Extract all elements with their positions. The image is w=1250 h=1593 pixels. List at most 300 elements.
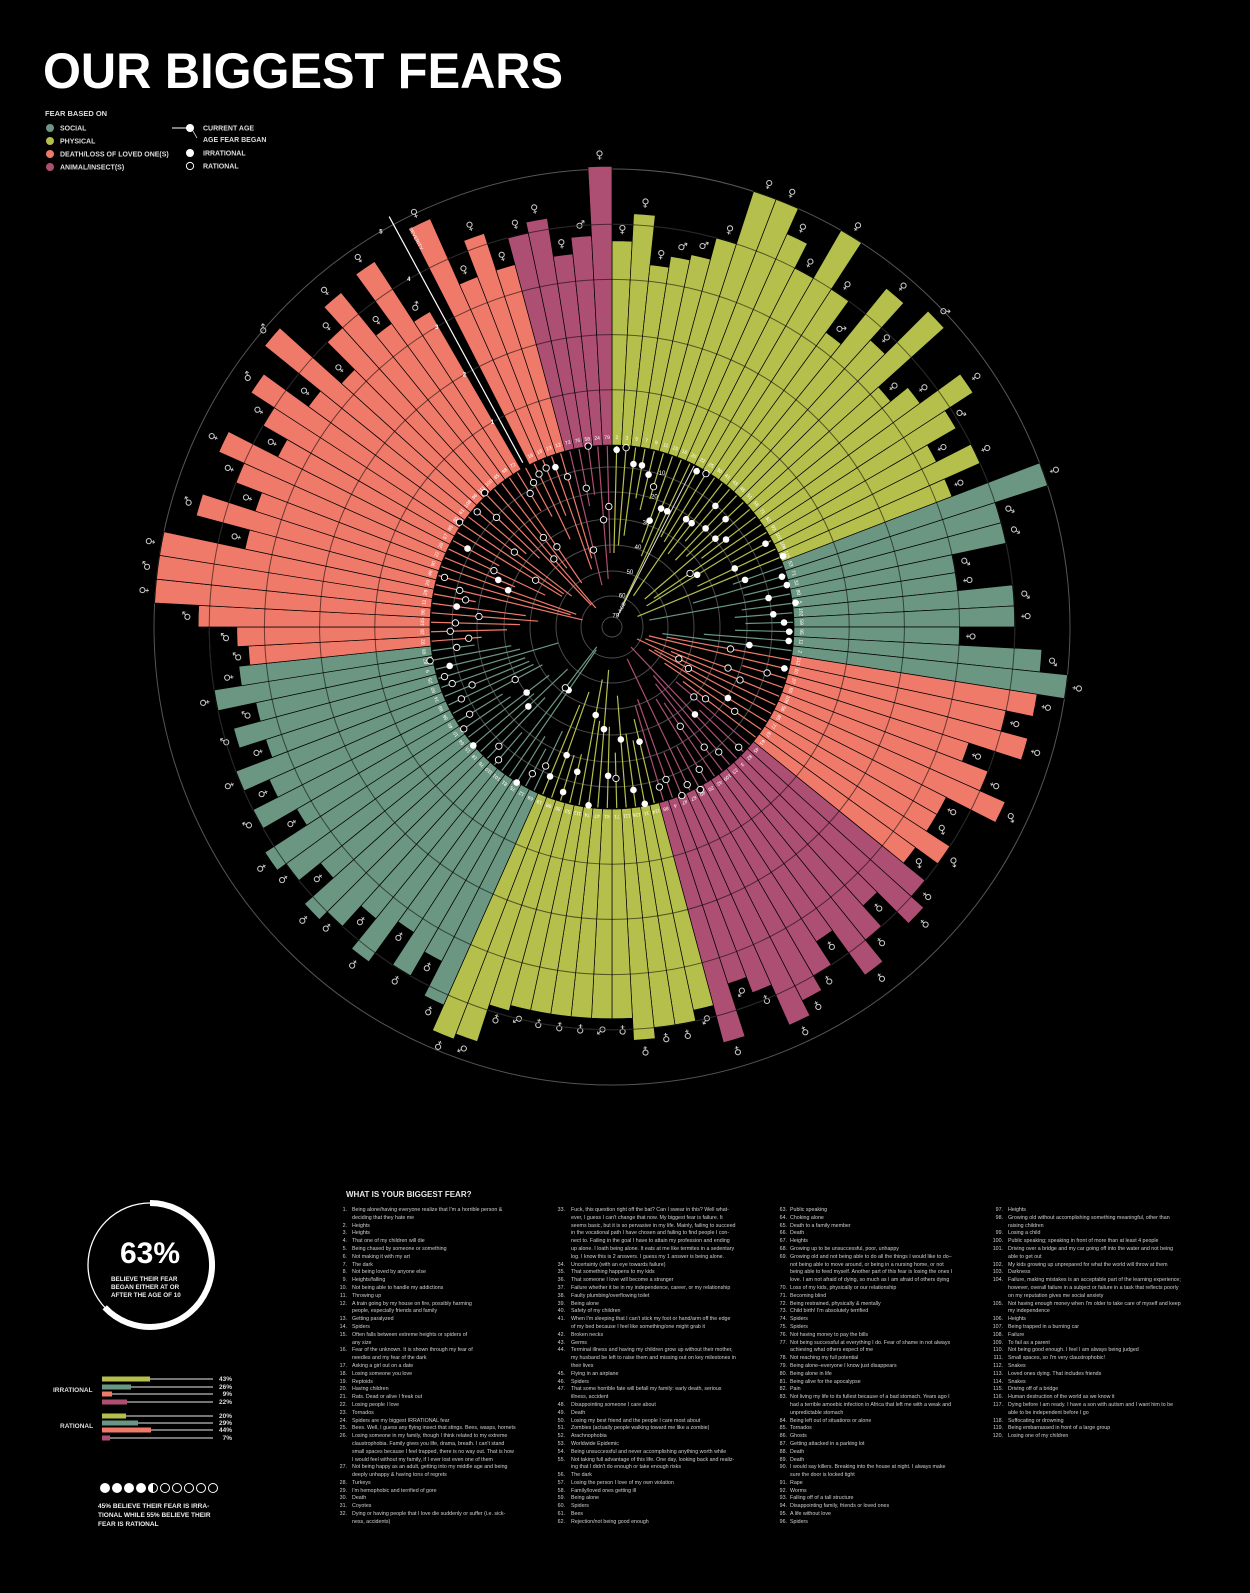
list column 3: Death xyxy=(790,1449,804,1455)
radial chart: ♀ xyxy=(529,202,540,216)
radial chart: ♂ xyxy=(700,1012,712,1027)
text: 43. xyxy=(558,1340,565,1346)
radial chart: 20 xyxy=(651,495,658,501)
text: 33. xyxy=(558,1207,565,1213)
text: 111. xyxy=(993,1355,1003,1361)
radial chart: ♀ xyxy=(987,779,1002,792)
radial chart: ♀ xyxy=(319,920,334,935)
radial chart: 12 xyxy=(555,442,562,449)
list column 3: Rape xyxy=(790,1480,803,1486)
radial chart: ♀ xyxy=(422,1003,435,1019)
radial chart: 3 xyxy=(739,761,745,767)
radial chart: 10 xyxy=(452,730,460,738)
text: 91. xyxy=(780,1480,787,1486)
radial chart: ♂ xyxy=(934,821,950,837)
radial chart: 20 xyxy=(690,453,697,460)
list column 2: ever, I guess I can't change that now. My biggest fear is failure. It xyxy=(571,1215,723,1221)
radial chart: 102 xyxy=(797,608,804,617)
text: 69. xyxy=(780,1254,787,1260)
radial chart: ♀ xyxy=(1039,702,1054,713)
radial chart: 101 xyxy=(492,772,502,782)
radial chart: ♀ xyxy=(919,889,935,903)
list column 3: Becoming blind xyxy=(790,1293,826,1299)
list column 4: able to be independent before I go xyxy=(1008,1410,1089,1416)
radial chart: ♀ xyxy=(251,404,266,417)
radial chart: ♂ xyxy=(958,556,972,568)
radial chart: ♀ xyxy=(284,816,299,830)
radial chart: ♀ xyxy=(724,222,735,237)
stat: irrational vs rational bars: 9% xyxy=(223,1391,232,1398)
list column 4: able to get out xyxy=(1008,1254,1042,1260)
list column 4: Heights xyxy=(1008,1207,1026,1213)
text: 35. xyxy=(558,1269,565,1275)
radial chart: ♀ xyxy=(824,938,838,953)
radial chart: ♀ xyxy=(298,384,313,399)
radial chart: 110 xyxy=(484,766,494,776)
text: 119. xyxy=(993,1425,1003,1431)
list column 1: Not making it with my art xyxy=(352,1254,410,1260)
list column 2: Broken necks xyxy=(571,1332,603,1338)
stat: 63% ring: BELIEVE THEIR FEAR xyxy=(111,1276,178,1283)
list column 2: Spiders xyxy=(571,1503,589,1509)
radial chart: ♀ xyxy=(250,746,265,758)
text: 44. xyxy=(558,1347,565,1353)
radial chart: 29 xyxy=(425,579,432,586)
radial chart: ♀ xyxy=(240,492,255,504)
list column 3: Being left out of situations or alone xyxy=(790,1418,871,1424)
text: 116. xyxy=(993,1394,1003,1400)
list column 1: Turkeys xyxy=(352,1480,371,1486)
radial chart: 50 xyxy=(627,570,634,576)
list column 4: Losing one of my children xyxy=(1008,1433,1068,1439)
list column 1: Asking a girl out on a date xyxy=(352,1363,413,1369)
radial chart: ♀ xyxy=(796,221,809,236)
radial chart: 85 xyxy=(493,473,501,481)
list column 4: Small spaces, so I'm very claustrophobic! xyxy=(1008,1355,1105,1361)
stat: irrational vs rational bars: 22% xyxy=(219,1399,232,1406)
text: 51. xyxy=(558,1425,565,1431)
radial chart: ♀ xyxy=(595,148,604,162)
list column 2: Death xyxy=(571,1410,585,1416)
list column 2: Being unsuccessful and never accomplishing anything worth while xyxy=(571,1449,726,1455)
stat: irrational vs rational bars: 20% xyxy=(219,1413,232,1420)
radial chart: ♀ xyxy=(961,575,975,585)
list column 1: Fear of the unknown. It is shown through my fear of xyxy=(352,1347,473,1353)
list column 4: however, overall failure in a subject or failure in a task that reflects poorly xyxy=(1008,1285,1178,1291)
radial chart: ♀ xyxy=(319,319,334,334)
radial chart: ♀ xyxy=(432,1038,445,1053)
list column 3: Being restrained, physically & mentally xyxy=(790,1301,881,1307)
text: 26. xyxy=(340,1433,347,1439)
text: 64. xyxy=(780,1215,787,1221)
radial chart: 69 xyxy=(527,794,534,801)
list column 3: Not having money to pay the bills xyxy=(790,1332,868,1338)
radial chart: 2 xyxy=(796,650,803,654)
list column 4: Losing a child xyxy=(1008,1230,1040,1236)
list column 2: Spiders xyxy=(571,1379,589,1385)
text: 72. xyxy=(780,1301,787,1307)
text: 65. xyxy=(780,1223,787,1229)
radial chart: 3 xyxy=(625,435,629,442)
legend: fear based on xyxy=(45,109,169,172)
list column 2: Being alone xyxy=(571,1495,599,1501)
radial chart: 29 xyxy=(423,589,430,596)
radial chart: 98 xyxy=(545,801,553,809)
text: 7. xyxy=(343,1262,347,1268)
radial chart: 22 xyxy=(434,551,441,558)
text: 109. xyxy=(993,1340,1003,1346)
list column 3: Choking alone xyxy=(790,1215,824,1221)
text: 103. xyxy=(993,1269,1003,1275)
radial chart: 60 xyxy=(619,594,626,600)
radial chart: ♀ xyxy=(533,1016,544,1031)
text: 13. xyxy=(340,1316,347,1322)
list column 4: Growing old without accomplishing something meaningful, other than xyxy=(1008,1215,1170,1221)
text: 87. xyxy=(780,1441,787,1447)
radial chart: 18 xyxy=(527,452,535,460)
radial chart: 98 xyxy=(501,467,509,475)
radial chart: 9 xyxy=(425,669,431,673)
list column 2: of my bed because I feel like something/one might grab it xyxy=(571,1324,705,1330)
radial chart: 92 xyxy=(420,639,427,645)
list column 2: Failure whether it be in my independence, career, or my relationship xyxy=(571,1285,730,1291)
radial chart: 79 xyxy=(604,435,610,441)
radial chart: ♀ xyxy=(276,872,291,886)
text: 61. xyxy=(558,1511,565,1517)
radial chart: ♂ xyxy=(180,611,193,621)
radial chart: ♂ xyxy=(1046,656,1059,667)
list column 1: Heights xyxy=(352,1230,370,1236)
text: 59. xyxy=(558,1495,565,1501)
radial chart: ♀ xyxy=(618,223,627,236)
radial chart: ♀ xyxy=(969,370,984,384)
list column 3: A life without love xyxy=(790,1511,831,1517)
list column 3: Tornados xyxy=(790,1425,812,1431)
text: 80. xyxy=(780,1371,787,1377)
list column 2: Family/loved ones getting ill xyxy=(571,1488,636,1494)
radial chart: 74 xyxy=(433,695,441,703)
list column 3: Disappointing family, friends or loved ones xyxy=(790,1503,889,1509)
radial chart: ♀ xyxy=(222,779,237,792)
text: 102. xyxy=(993,1262,1003,1268)
radial chart: ♀ xyxy=(222,673,236,682)
radial chart: 67 xyxy=(764,730,772,738)
list column 2: Losing the person I love of my own violation xyxy=(571,1480,674,1486)
radial chart: ♀ xyxy=(222,462,237,475)
radial chart: ♀ xyxy=(760,992,773,1007)
radial chart: 53 xyxy=(564,807,571,814)
radial chart: ♂ xyxy=(456,1041,469,1057)
list column 2: Rejection/not being good enough xyxy=(571,1519,649,1525)
list column 3: Falling off of a tall structure xyxy=(790,1495,854,1501)
text: 53. xyxy=(558,1441,565,1447)
text: 45. xyxy=(558,1371,565,1377)
list column 1: deciding that they hate me xyxy=(352,1215,414,1221)
list column 1: Not being happy as an adult, getting into my middle age and being xyxy=(352,1464,507,1470)
list column 2: Germs xyxy=(571,1340,587,1346)
radial chart: 25 xyxy=(707,462,715,470)
text: 8. xyxy=(343,1269,347,1275)
text: 78. xyxy=(780,1355,787,1361)
text: 89. xyxy=(780,1456,787,1462)
list column 3: Being alone in life xyxy=(790,1371,832,1377)
radial chart: 7 xyxy=(645,438,649,444)
radial chart: 101 xyxy=(773,532,783,542)
text: 1. xyxy=(343,1207,347,1213)
radial chart: ♀ xyxy=(803,255,816,271)
list column 1: Heights xyxy=(352,1223,370,1229)
radial chart: ♀ xyxy=(296,912,311,927)
list column 4: Not being good enough. I feel I am always being judged xyxy=(1008,1347,1139,1353)
text: 83. xyxy=(780,1394,787,1400)
radial chart: ♀ xyxy=(496,249,508,264)
text: 4. xyxy=(343,1238,347,1244)
radial chart: ♂ xyxy=(596,1023,607,1037)
radial chart: ♀ xyxy=(895,279,910,294)
text: 57. xyxy=(558,1480,565,1486)
text: 84. xyxy=(780,1418,787,1424)
list column 1: needles and my fear of the dark xyxy=(352,1355,426,1361)
radial chart: 96 xyxy=(471,493,479,501)
list column 3: Not reaching my full potential xyxy=(790,1355,858,1361)
radial chart: ♂ xyxy=(408,299,423,315)
list column 1: I would feel without my family, if I ever lost even one of them xyxy=(352,1456,493,1462)
text: 107. xyxy=(993,1324,1003,1330)
legend: age and rationality: RATIONAL xyxy=(203,164,239,170)
radial chart: 88 xyxy=(662,805,669,812)
radial chart: 76 xyxy=(574,438,581,445)
list column 3: not being able to move around, or being in a nursing home, or not xyxy=(790,1262,944,1268)
list column 1: Throwing up xyxy=(352,1293,381,1299)
text: 68. xyxy=(780,1246,787,1252)
list column 4: Failure, making mistakes is an acceptable part of the learning experience; xyxy=(1008,1277,1181,1283)
list column 3: Death xyxy=(790,1230,804,1236)
radial chart: ♀ xyxy=(1071,683,1084,693)
text: 55. xyxy=(558,1456,565,1462)
list column 2: Uncertainty (with an eye towards failure) xyxy=(571,1262,666,1268)
radial chart: 108 xyxy=(463,499,473,509)
radial chart: 112 xyxy=(794,657,802,666)
radial chart: 115 xyxy=(782,550,791,560)
list column 4: My kids growing up unprepared for what the world will throw at them xyxy=(1008,1262,1168,1268)
radial chart: 3 xyxy=(435,325,439,331)
radial chart: ♀ xyxy=(661,1031,671,1045)
stat: 45% dots: 45% BELIEVE THEIR FEAR IS IRRA- xyxy=(98,1503,209,1510)
radial chart: 10 xyxy=(659,471,666,477)
radial chart: 20 xyxy=(707,784,715,792)
text: 98. xyxy=(996,1215,1003,1221)
radial chart: ♀ xyxy=(346,957,360,972)
radial chart: ♀ xyxy=(421,959,434,974)
radial chart: 90 xyxy=(430,560,438,568)
radial chart: ♀ xyxy=(1047,464,1062,476)
list column 3: Spiders xyxy=(790,1519,808,1525)
radial chart: ♂ xyxy=(676,239,689,254)
list column 1: Reptoids xyxy=(352,1379,373,1385)
list column 4: Human destruction of the world as we know it xyxy=(1008,1394,1115,1400)
list column 1: Heights/falling xyxy=(352,1277,385,1283)
radial chart: ♀ xyxy=(641,196,650,210)
list column 4: Loved ones dying. That includes friends xyxy=(1008,1371,1101,1377)
radial chart: ♂ xyxy=(240,369,256,384)
radial chart: 111 xyxy=(573,809,582,816)
radial chart: 95 xyxy=(798,629,804,635)
radial chart: ♂ xyxy=(239,708,254,721)
list column 2: That someone I love will become a stranger xyxy=(571,1277,673,1283)
list column 4 xyxy=(993,1207,1181,1439)
stat: 63% ring xyxy=(88,1203,212,1327)
list column 2: When I'm sleeping that I can't stick my foot or hand/arm off the edge xyxy=(571,1316,730,1322)
radial chart: 57 xyxy=(442,533,450,541)
radial chart: 93 xyxy=(769,524,777,532)
list column 3: love. I am not afraid of dying, so much as I am afraid of others dying xyxy=(790,1277,949,1283)
radial chart: 56 xyxy=(752,500,760,508)
radial chart: ♂ xyxy=(1003,810,1019,824)
radial chart: 2 xyxy=(615,435,619,441)
text: 77. xyxy=(780,1340,787,1346)
radial chart: 67 xyxy=(689,794,697,802)
radial chart: ♀ xyxy=(255,787,271,800)
stat: irrational vs rational bars: RATIONAL xyxy=(60,1423,93,1430)
radial chart: 85 xyxy=(774,713,782,721)
list column 2: Terminal illness and having my children grow up without their mother, xyxy=(571,1347,733,1353)
list column 1: Being alone/having everyone realize that I'm a horrible person & xyxy=(352,1207,502,1213)
text: 97. xyxy=(996,1207,1003,1213)
list column 1: Losing someone you love xyxy=(352,1371,412,1377)
radial chart: ♀ xyxy=(352,251,366,266)
text: 75. xyxy=(780,1324,787,1330)
text: 9. xyxy=(343,1277,347,1283)
stat: 45% dots xyxy=(98,1483,218,1528)
list column 4: Public speaking; speaking in front of more than at least 4 people xyxy=(1008,1238,1158,1244)
radial chart: 70 xyxy=(612,614,620,620)
radial chart: ♀ xyxy=(392,929,406,944)
radial chart: 22 xyxy=(698,457,706,465)
text: 22. xyxy=(340,1402,347,1408)
text: 90. xyxy=(780,1464,787,1470)
list column 3: Being alone–everyone I know just disappears xyxy=(790,1363,897,1369)
stat: 63% ring: BEGAN EITHER AT OR xyxy=(111,1284,180,1291)
list column 3: Public speaking xyxy=(790,1207,827,1213)
radial chart: 61 xyxy=(758,738,766,746)
radial chart: ♀ xyxy=(265,436,280,449)
list column 2: Flying in an airplane xyxy=(571,1371,618,1377)
radial chart: AGE xyxy=(617,601,628,614)
text: 6. xyxy=(343,1254,347,1260)
list column 2: Bees xyxy=(571,1511,583,1517)
radial chart: ♂ xyxy=(231,651,244,662)
radial chart: 37 xyxy=(789,677,797,684)
list column 1: Bees. Well, I guess any flying insect that stings. Bees, wasps, hornets xyxy=(352,1425,516,1431)
radial chart: 80 xyxy=(794,589,801,596)
text: 67. xyxy=(780,1238,787,1244)
list column 1: Losing someone in my family, though I think related to my extreme xyxy=(352,1433,507,1439)
radial chart: ♀ xyxy=(557,237,566,251)
list column 3: achieving what others expect of me xyxy=(790,1347,873,1353)
stat: irrational vs rational bars: 43% xyxy=(219,1376,232,1383)
radial chart: ♀ xyxy=(254,861,269,875)
radial chart: 96 xyxy=(420,609,427,615)
text: 63. xyxy=(780,1207,787,1213)
text: 31. xyxy=(340,1503,347,1509)
radial chart: ♀ xyxy=(143,536,157,547)
text: 38. xyxy=(558,1293,565,1299)
radial chart: 77 xyxy=(769,722,777,730)
text: 14. xyxy=(340,1324,347,1330)
text: 95. xyxy=(780,1511,787,1517)
list column 2: That something happens to my kids xyxy=(571,1269,655,1275)
text: 29. xyxy=(340,1488,347,1494)
radial chart: 51 xyxy=(745,493,753,501)
radial chart: ♂ xyxy=(952,406,969,421)
text: 85. xyxy=(780,1425,787,1431)
radial chart: 18 xyxy=(536,448,544,456)
radial chart: 106 xyxy=(778,541,787,551)
list column 4: To fail as a parent xyxy=(1008,1340,1050,1346)
text: 5. xyxy=(343,1246,347,1252)
text: 117. xyxy=(993,1402,1003,1408)
radial chart: 100 xyxy=(484,478,495,488)
text: 21. xyxy=(340,1394,347,1400)
list column 4: Snakes xyxy=(1008,1363,1026,1369)
radial chart: 32 xyxy=(792,579,799,586)
text: 39. xyxy=(558,1301,565,1307)
radial chart: ♀ xyxy=(874,934,888,950)
text: 92. xyxy=(780,1488,787,1494)
radial chart: 19 xyxy=(536,798,543,805)
list column 4: Driving off of a bridge xyxy=(1008,1386,1058,1392)
stat: 63% ring: 63% xyxy=(120,1237,180,1270)
list column 1: Getting paralyzed xyxy=(352,1316,394,1322)
text: 70. xyxy=(780,1285,787,1291)
radial chart: 41 xyxy=(604,813,610,819)
radial chart: ♀ xyxy=(354,913,368,929)
text: 56. xyxy=(558,1472,565,1478)
radial chart: 58 xyxy=(584,436,591,443)
list column 1: Not being able to handle my addictions xyxy=(352,1285,443,1291)
list column 4: on my reputation gives me social anxiety xyxy=(1008,1293,1103,1299)
radial chart: 48 xyxy=(427,570,435,577)
radial chart: 66 xyxy=(421,648,428,655)
radial chart: 59 xyxy=(798,619,804,625)
radial chart: 30 xyxy=(715,467,723,475)
text: 42. xyxy=(558,1332,565,1338)
radial chart: ♂ xyxy=(911,855,927,870)
list column 3: Loss of my kids, physically or our relationship xyxy=(790,1285,896,1291)
text: 3. xyxy=(343,1230,347,1236)
radial chart: ♀ xyxy=(916,381,931,395)
text: 28. xyxy=(340,1480,347,1486)
text: 96. xyxy=(780,1519,787,1525)
radial chart: 45 xyxy=(751,746,760,754)
list column 1: Rats. Dead or alive I freak out xyxy=(352,1394,422,1400)
legend: fear based on: SOCIAL xyxy=(60,126,87,132)
list column 1: Not being loved by anyone else xyxy=(352,1269,426,1275)
radial chart: ♀ xyxy=(198,697,212,708)
radial chart: 15 xyxy=(464,746,472,754)
radial chart: 64 xyxy=(458,738,466,746)
list column 4: Being trapped in a burning car xyxy=(1008,1324,1079,1330)
radial chart: ♀ xyxy=(978,442,994,455)
radial chart: 47 xyxy=(594,812,600,819)
radial chart: SEVERITY xyxy=(407,227,424,252)
text: 105. xyxy=(993,1301,1003,1307)
radial chart: 25 xyxy=(427,677,434,684)
radial chart: ♀ xyxy=(917,916,932,931)
list column 2: up alone. I loath being alone. It eats at me like termites in a sedentary xyxy=(571,1246,734,1252)
stat: irrational vs rational bars: IRRATIONAL xyxy=(53,1387,93,1394)
list column 1: small spaces because I feel trapped, there is no way out. That is how xyxy=(352,1449,514,1455)
